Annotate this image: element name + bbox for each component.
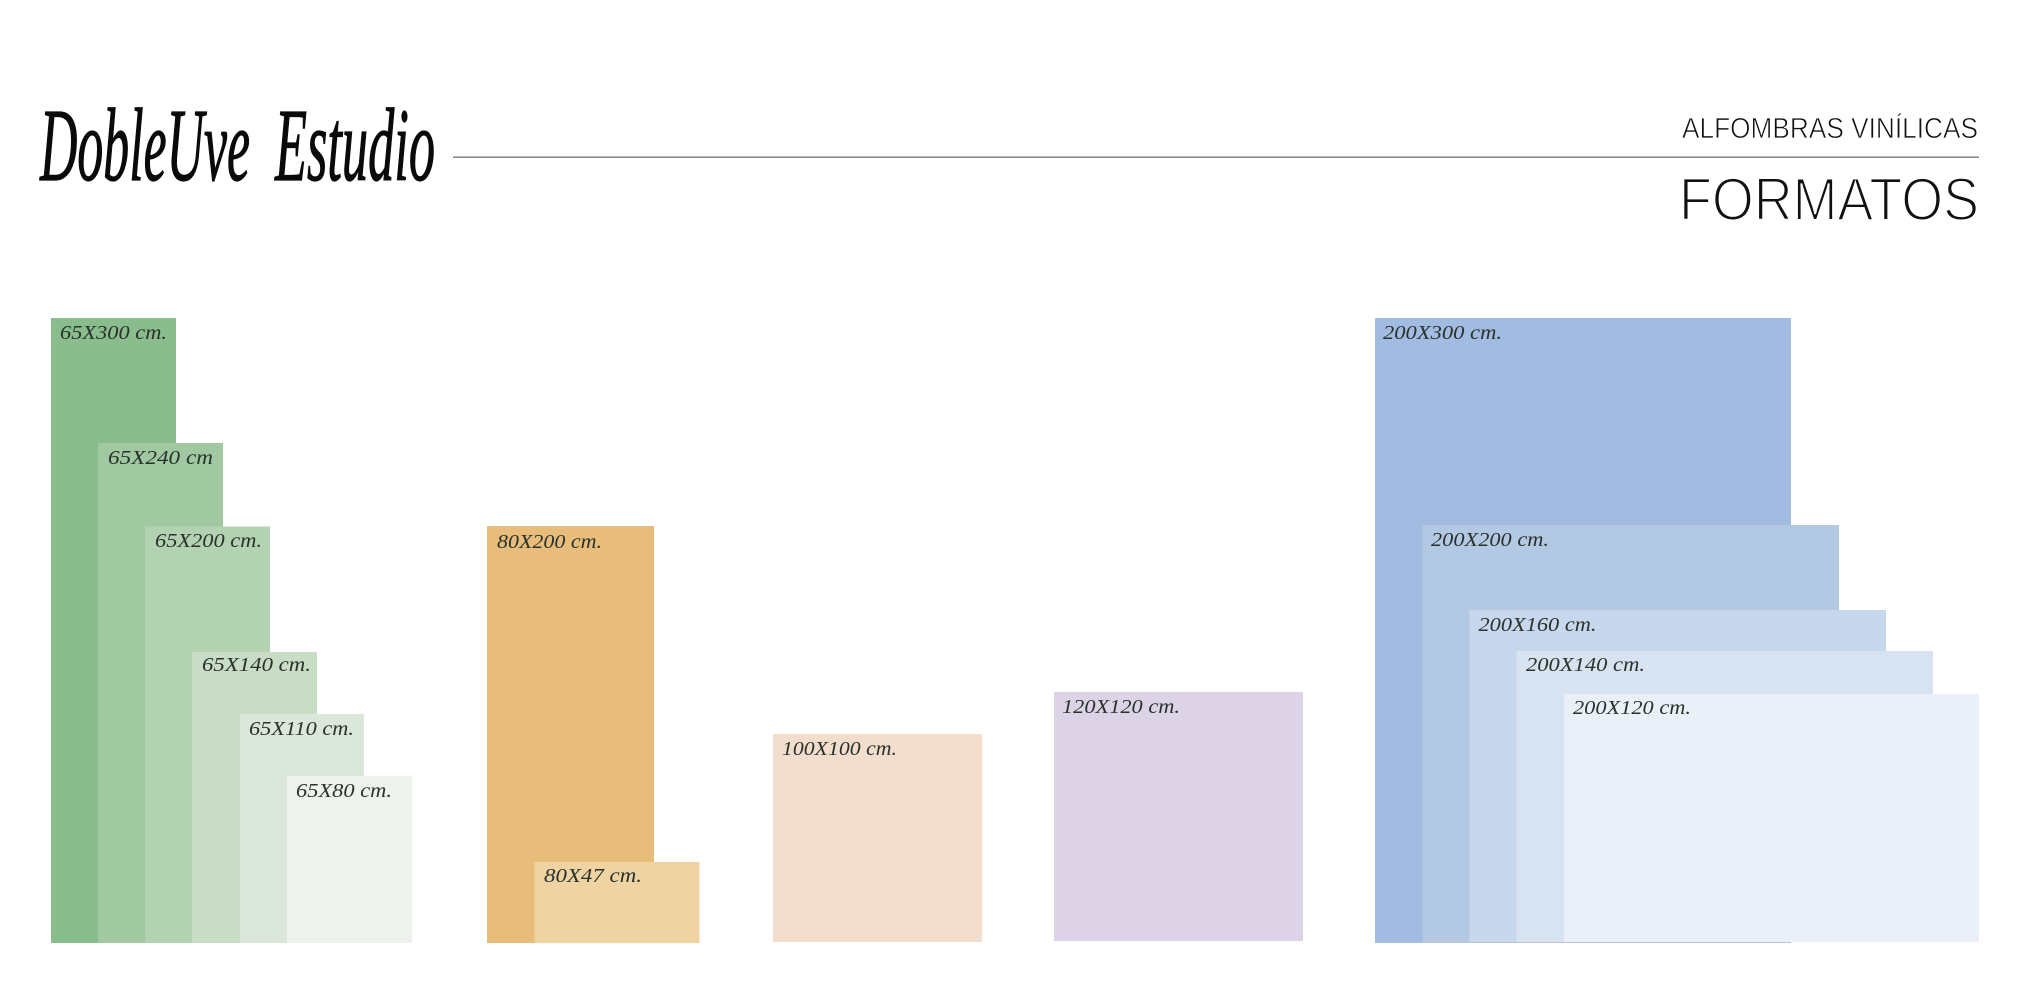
format 65x200 <box>145 526 270 943</box>
format 65x140 <box>192 652 317 943</box>
title: Formatos: FORMATOS <box>1679 166 1979 233</box>
format 80x200 <box>487 526 654 943</box>
format 200x200: 200X200 cm. <box>1431 529 1549 551</box>
format 200x140: 200X140 cm. <box>1526 654 1645 676</box>
format 65x240 <box>98 443 223 943</box>
panel: blue 200 cm formats <box>1375 318 1979 943</box>
format 80x200: 80X200 cm. <box>497 531 602 553</box>
format 65x300 <box>51 318 176 943</box>
logo: DobleUve Estudio: Estudio <box>274 88 435 203</box>
format 65x80 <box>287 776 412 943</box>
header divider line <box>453 156 1979 158</box>
format 120x120: 120X120 cm. <box>1062 696 1180 718</box>
format 65x110: 65X110 cm. <box>249 718 354 740</box>
format 200x140 <box>1516 651 1933 942</box>
format 200x300: 200X300 cm. <box>1383 322 1502 344</box>
format 80x47 <box>534 862 700 943</box>
format 200x120 <box>1564 694 1979 942</box>
format 100x100 <box>773 734 982 942</box>
format 65x300: 65X300 cm. <box>60 322 167 344</box>
panel: green 65 cm formats <box>51 318 412 943</box>
format 65x240: 65X240 cm <box>108 447 213 469</box>
logo: DobleUve Estudio: DobleUve <box>39 88 250 203</box>
format 65x80: 65X80 cm. <box>296 780 392 802</box>
format 200x300 <box>1375 318 1791 943</box>
format 80x47: 80X47 cm. <box>544 865 642 887</box>
panel: orange 80 cm formats <box>487 526 700 943</box>
format 100x100: 100X100 cm. <box>782 738 897 760</box>
format 65x110 <box>240 714 364 943</box>
format 200x200 <box>1422 525 1839 942</box>
format 65x140: 65X140 cm. <box>202 654 311 676</box>
subtitle: Alfombras vinílicas: ALFOMBRAS VINÍLICAS <box>1682 112 1978 145</box>
format 200x160: 200X160 cm. <box>1478 614 1596 636</box>
format 120x120 <box>1054 692 1303 941</box>
format 200x160 <box>1470 610 1886 942</box>
format 65x200: 65X200 cm. <box>155 530 262 552</box>
format 200x120: 200X120 cm. <box>1573 697 1691 719</box>
